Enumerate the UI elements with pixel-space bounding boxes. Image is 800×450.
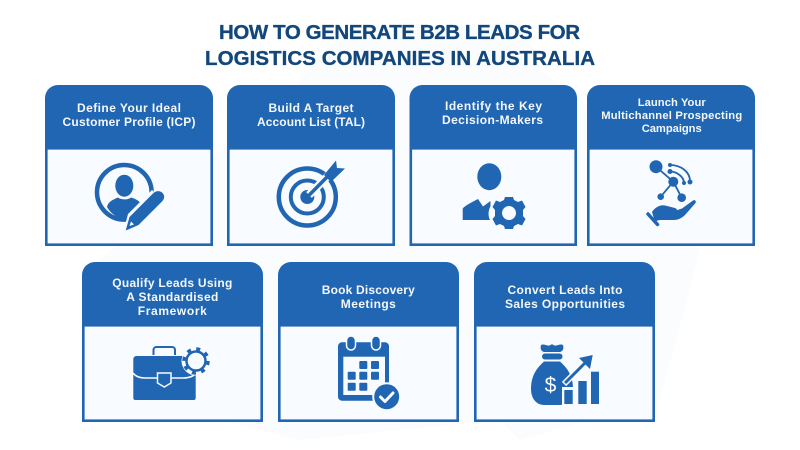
card heading: Book Discovery bbox=[322, 283, 415, 297]
card heading: Launch Your bbox=[638, 97, 706, 109]
card heading bbox=[62, 101, 196, 129]
card heading: Build A Target bbox=[268, 101, 354, 115]
card heading bbox=[601, 97, 742, 135]
card heading: Multichannel Prospecting bbox=[601, 110, 742, 122]
card heading: Framework bbox=[138, 304, 207, 318]
card heading bbox=[257, 101, 365, 129]
card heading: A Standardised bbox=[126, 290, 218, 304]
icon: profile with pencil bbox=[97, 165, 168, 233]
panel: qualify leads bbox=[82, 262, 263, 421]
icon: target with arrow bbox=[279, 160, 345, 226]
panel: convert leads bbox=[474, 262, 655, 421]
card header bbox=[587, 85, 755, 149]
card heading: Qualify Leads Using bbox=[112, 276, 232, 290]
icon: briefcase with gear bbox=[133, 346, 210, 400]
panel: define ideal customer profile bbox=[45, 85, 213, 245]
card header bbox=[227, 85, 395, 149]
icon: money bag with growth chart bbox=[531, 344, 599, 406]
card header bbox=[45, 85, 213, 149]
card header bbox=[82, 262, 263, 326]
icon: money bag with growth chart: $ bbox=[545, 374, 557, 397]
card heading: Decision-Makers bbox=[442, 113, 543, 127]
card heading: Campaigns bbox=[642, 123, 702, 135]
card heading: Identify the Key bbox=[445, 99, 542, 113]
card heading: Convert Leads Into bbox=[508, 283, 622, 297]
card heading: Meetings bbox=[341, 297, 396, 311]
icon: person with gear bbox=[463, 163, 526, 229]
icon: calendar with check bbox=[338, 336, 401, 411]
card header bbox=[410, 85, 577, 149]
card heading bbox=[112, 276, 232, 318]
card heading: Account List (TAL) bbox=[257, 115, 365, 129]
card body bbox=[228, 148, 394, 245]
card body bbox=[46, 148, 212, 245]
panel: identify decision-makers bbox=[410, 85, 577, 245]
card heading: Customer Profile (ICP) bbox=[62, 115, 196, 129]
title: LOGISTICS COMPANIES IN AUSTRALIA bbox=[205, 47, 595, 70]
card heading: Define Your Ideal bbox=[77, 101, 181, 115]
card body bbox=[475, 325, 654, 421]
card heading: Sales Opportunities bbox=[505, 297, 625, 311]
card body bbox=[588, 148, 754, 245]
card header bbox=[474, 262, 655, 326]
panel: multichannel prospecting campaigns bbox=[587, 85, 755, 245]
card heading bbox=[505, 283, 625, 311]
card heading bbox=[322, 283, 415, 311]
panel: book discovery meetings bbox=[278, 262, 459, 421]
panel: build target account list bbox=[227, 85, 395, 245]
icon: network in hand bbox=[648, 160, 696, 224]
title bbox=[205, 21, 595, 70]
card body bbox=[411, 148, 576, 245]
card body bbox=[279, 325, 458, 421]
card header bbox=[278, 262, 459, 326]
title: HOW TO GENERATE B2B LEADS FOR bbox=[219, 21, 580, 44]
card heading bbox=[442, 99, 543, 127]
card body bbox=[83, 325, 262, 421]
